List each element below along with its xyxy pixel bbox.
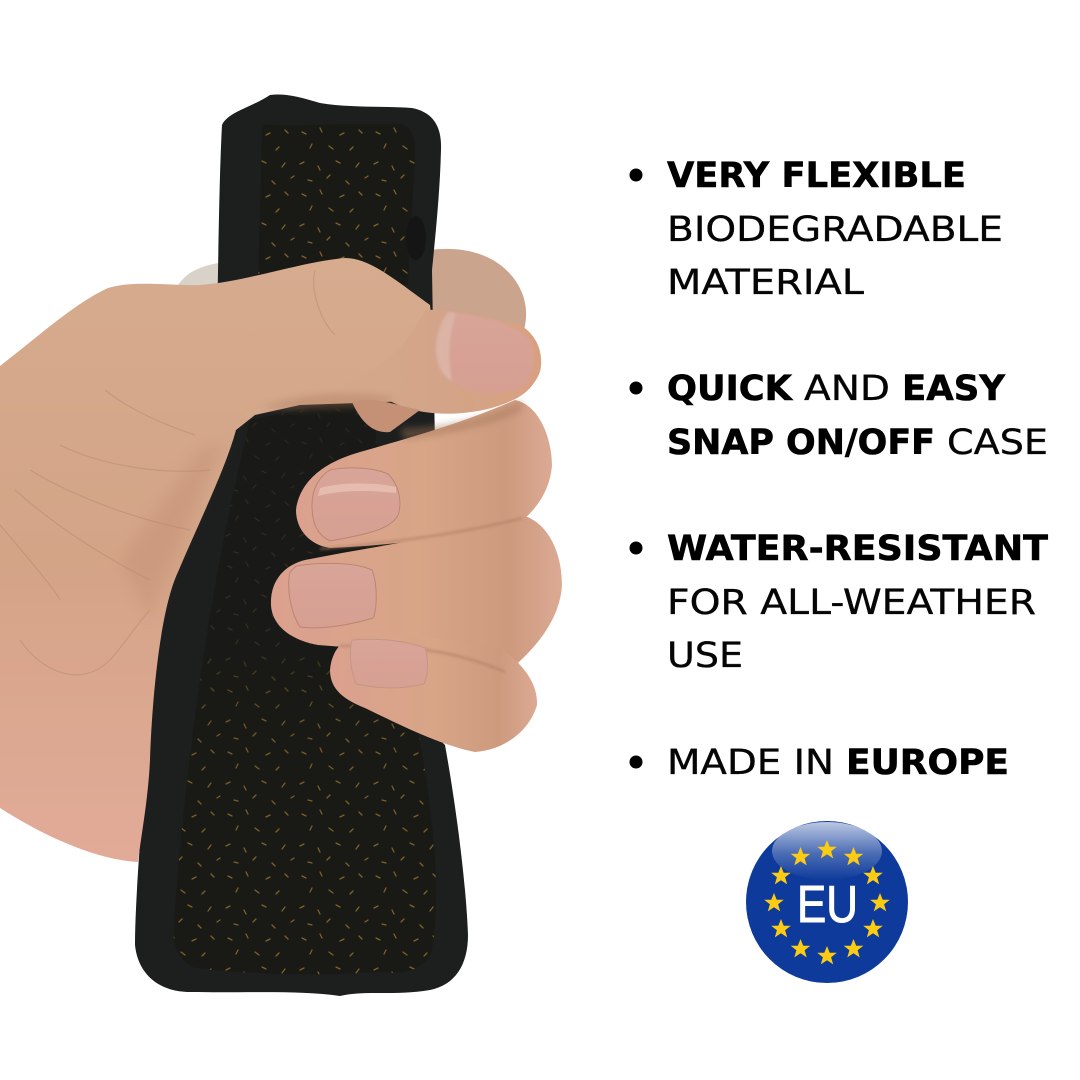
text: water-resistant: WATER-RESISTANT <box>667 529 1048 569</box>
text: and: AND <box>804 369 890 409</box>
text: europe: EUROPE <box>846 743 1009 783</box>
case body <box>135 94 468 996</box>
text: material: MATERIAL <box>667 263 865 303</box>
thumb <box>235 310 541 420</box>
text: very flexible: VERY FLEXIBLE <box>667 156 966 196</box>
badge gloss <box>772 822 882 880</box>
ring finger <box>271 516 562 674</box>
thumb shading <box>260 393 395 410</box>
text: easy: EASY <box>902 369 1006 409</box>
feature: very flexible biodegradable material <box>630 156 1003 303</box>
little fingernail <box>350 639 428 688</box>
bullet <box>630 756 642 768</box>
camera cut-out shadow <box>406 216 426 260</box>
ring of stars <box>764 840 890 964</box>
feature list <box>630 156 1048 783</box>
index fingertip behind thumb <box>430 249 526 330</box>
icon: EU badge <box>746 821 908 983</box>
palm shadow <box>120 440 225 620</box>
text: snap on/off: SNAP ON/OFF <box>667 423 935 463</box>
text: for all-weather: FOR ALL-WEATHER <box>667 583 1036 623</box>
badge label: EU <box>797 876 858 934</box>
little finger <box>330 637 537 752</box>
thumbnail <box>436 312 533 393</box>
hand wrinkles <box>0 270 335 675</box>
finger creases <box>320 518 522 672</box>
middle fingernail <box>312 468 400 541</box>
case speckled inner panel bottom <box>174 395 436 974</box>
case speckled inner panel top <box>258 124 415 285</box>
ring fingernail <box>289 563 376 628</box>
bullet <box>630 168 642 182</box>
speckle dimming overlay <box>178 395 430 860</box>
web under thumb <box>352 400 420 432</box>
bullet <box>630 382 642 394</box>
palm and back of hand <box>0 258 440 862</box>
feature: quick and easy snap on/off case <box>630 369 1048 463</box>
text: use: USE <box>667 636 743 676</box>
text: case: CASE <box>947 423 1048 463</box>
photo: hand gripping bent black phone case <box>0 94 562 996</box>
feature: made in europe <box>630 743 1009 783</box>
bullet <box>630 542 642 554</box>
text: biodegradable: BIODEGRADABLE <box>667 210 1003 250</box>
text: quick: QUICK <box>667 369 794 409</box>
feature: water-resistant for all-weather use <box>630 529 1048 676</box>
text: made in: MADE IN <box>667 743 834 783</box>
knuckle behind the case <box>178 262 240 290</box>
middle finger back <box>296 400 552 548</box>
shadow of thumb on middle finger <box>400 400 525 440</box>
